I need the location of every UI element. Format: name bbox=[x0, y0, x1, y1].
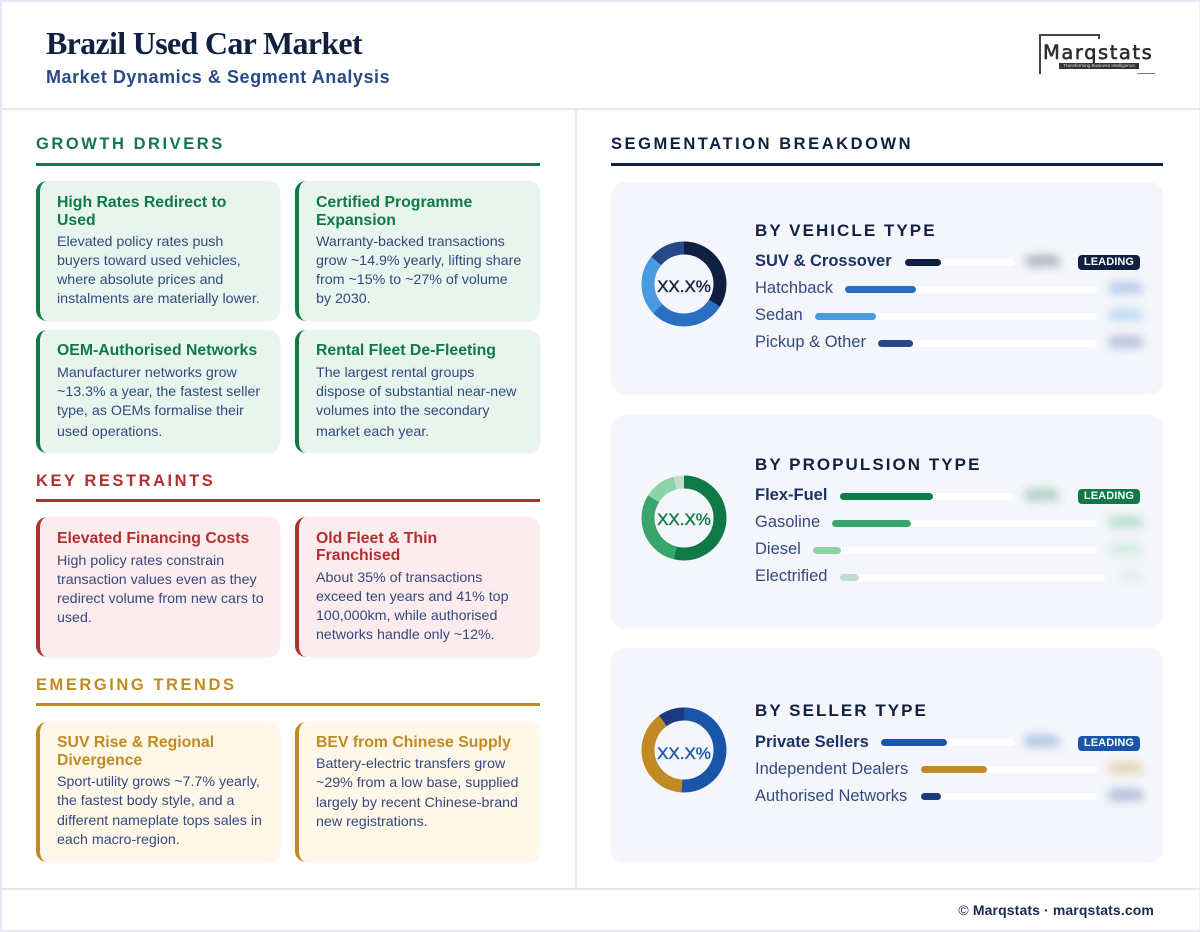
badge: leading: LEADING bbox=[1084, 256, 1134, 268]
bar: Private Sellers bbox=[881, 739, 1015, 746]
row: SUV: SUV & Crossover bbox=[755, 252, 892, 270]
bar: Flex-Fuel bbox=[840, 493, 1014, 500]
row: Pickup: Pickup & Other bbox=[755, 333, 866, 351]
logo: Marqstats: Transforming Business Intelligence bbox=[1063, 63, 1135, 68]
card: SUV rise: different nameplate tops sales in bbox=[57, 813, 262, 829]
card: BEV supply: BEV from Chinese Supply bbox=[316, 734, 511, 751]
donut value: XX.X% bbox=[657, 510, 711, 529]
row: Authorised Networks: Authorised Networks bbox=[755, 787, 907, 805]
bar: Authorised Networks bbox=[921, 793, 1097, 800]
value: Independent Dealers: XX% bbox=[1109, 760, 1142, 777]
header band bbox=[2, 2, 1200, 110]
value: Sedan: XX% bbox=[1109, 307, 1142, 324]
badge: leading: LEADING bbox=[1084, 490, 1134, 502]
heading: segmentation breakdown: SEGMENTATION BREAKDOWN bbox=[611, 135, 913, 153]
card: old fleet: exceed ten years and 41% top bbox=[316, 589, 509, 605]
bar: Sedan bbox=[815, 313, 1097, 320]
footer bbox=[2, 888, 1200, 932]
donut value: XX.X% bbox=[657, 277, 711, 296]
donut value: XX.X% bbox=[657, 744, 711, 763]
card: high rates: instalments are materially lower. bbox=[57, 291, 260, 307]
bar: Gasoline bbox=[832, 520, 1097, 527]
card: rental fleet: market each year. bbox=[316, 424, 429, 440]
bar: Electrified bbox=[840, 574, 1105, 581]
value: Pickup: XX% bbox=[1109, 334, 1142, 351]
panel: propulsion type bbox=[611, 415, 1163, 628]
card: high rates bbox=[36, 181, 280, 321]
card: old fleet: About 35% of transactions bbox=[316, 570, 482, 586]
card: certified programme: Expansion bbox=[316, 212, 396, 228]
card: high rates: where absolute prices and bbox=[57, 272, 223, 288]
card: rental fleet: dispose of substantial near-new bbox=[316, 384, 516, 400]
value: Electrified: X% bbox=[1119, 568, 1142, 585]
value: SUV: XX% bbox=[1026, 253, 1059, 270]
row: Private Sellers: Private Sellers bbox=[755, 733, 869, 751]
card: OEM networks bbox=[36, 330, 280, 453]
panel heading: BY SELLER TYPE bbox=[755, 701, 928, 720]
card: SUV rise: SUV Rise & Regional bbox=[57, 734, 214, 751]
panel heading: BY PROPULSION TYPE bbox=[755, 455, 981, 474]
card: financing costs: High policy rates constrain bbox=[57, 553, 224, 569]
card: old fleet: Old Fleet & Thin bbox=[316, 530, 437, 546]
donut: propulsion type bbox=[642, 476, 726, 560]
value: Authorised Networks: XX% bbox=[1109, 787, 1142, 804]
footer credit: © Marqstats · marqstats.com bbox=[958, 902, 1154, 918]
card: OEM networks: ~13.3% a year, the fastest seller bbox=[57, 384, 260, 400]
column divider bbox=[575, 110, 577, 888]
card: rental fleet bbox=[295, 330, 540, 453]
donut: seller type bbox=[642, 708, 726, 792]
card: rental fleet: The largest rental groups bbox=[316, 365, 474, 381]
card: rental fleet: Rental Fleet De-Fleeting bbox=[316, 342, 496, 359]
title: Brazil Used Car Market bbox=[46, 25, 362, 61]
card: BEV supply: new registrations. bbox=[316, 814, 428, 830]
bar: Diesel bbox=[813, 547, 1097, 554]
card: certified programme: Warranty-backed transactions bbox=[316, 234, 505, 250]
heading: key restraints: KEY RESTRAINTS bbox=[36, 472, 215, 490]
row: Diesel: Diesel bbox=[755, 540, 801, 558]
heading: growth drivers: GROWTH DRIVERS bbox=[36, 135, 225, 153]
card: BEV supply: ~29% from a low base, supplied bbox=[316, 775, 518, 791]
value: Flex-Fuel: XX% bbox=[1025, 487, 1058, 504]
card: financing costs: transaction values even as they bbox=[57, 572, 257, 588]
card: high rates: Elevated policy rates push bbox=[57, 234, 223, 250]
card: high rates: buyers toward used vehicles, bbox=[57, 253, 241, 269]
row: Sedan: Sedan bbox=[755, 306, 803, 324]
card: rental fleet: volumes into the secondary bbox=[316, 403, 489, 419]
card: certified programme: from ~15% to ~27% of volume bbox=[316, 272, 508, 288]
bar: Independent Dealers bbox=[921, 766, 1097, 773]
card: SUV rise: each macro-region. bbox=[57, 832, 180, 848]
bar: Pickup bbox=[878, 340, 1097, 347]
card: old fleet: Franchised bbox=[316, 547, 400, 564]
value: Diesel: XX% bbox=[1109, 541, 1142, 558]
card: SUV rise: the fastest body style, and a bbox=[57, 793, 234, 809]
badge: leading: LEADING bbox=[1084, 737, 1134, 749]
row: Hatchback: Hatchback bbox=[755, 279, 833, 297]
card: SUV rise: Sport-utility grows ~7.7% yearly, bbox=[57, 774, 260, 790]
card: old fleet bbox=[295, 517, 540, 657]
panel heading: BY VEHICLE TYPE bbox=[755, 221, 937, 240]
bar: SUV bbox=[905, 259, 1015, 266]
card: BEV supply bbox=[295, 722, 540, 862]
row: Flex-Fuel: Flex-Fuel bbox=[755, 486, 827, 504]
subtitle: Market Dynamics & Segment Analysis bbox=[46, 67, 390, 87]
card: BEV supply: largely by recent Chinese-brand bbox=[316, 795, 518, 811]
panel: seller type bbox=[611, 648, 1163, 862]
bar: Hatchback bbox=[845, 286, 1097, 293]
card: OEM networks: used operations. bbox=[57, 424, 162, 440]
badge: leading bbox=[1078, 489, 1140, 504]
row: Independent Dealers: Independent Dealers bbox=[755, 760, 908, 778]
row: Electrified: Electrified bbox=[755, 567, 827, 585]
value: Hatchback: XX% bbox=[1109, 280, 1142, 297]
logo: Marqstats bbox=[1039, 34, 1155, 74]
card: SUV rise bbox=[36, 722, 280, 862]
card: OEM networks: OEM-Authorised Networks bbox=[57, 342, 257, 359]
card: old fleet: networks handle only ~12%. bbox=[316, 627, 495, 643]
value: Gasoline: XX% bbox=[1109, 514, 1142, 531]
card: certified programme: Certified Programme bbox=[316, 194, 472, 211]
card: certified programme: by 2030. bbox=[316, 291, 371, 307]
card: OEM networks: type, as OEMs formalise their bbox=[57, 403, 244, 419]
card: financing costs: Elevated Financing Costs bbox=[57, 530, 249, 546]
card: financing costs: used. bbox=[57, 610, 92, 626]
value: Private Sellers: XX% bbox=[1025, 733, 1058, 750]
card: certified programme bbox=[295, 181, 540, 321]
card: high rates: High Rates Redirect to bbox=[57, 194, 226, 211]
card: SUV rise: Divergence bbox=[57, 752, 142, 768]
row: Gasoline: Gasoline bbox=[755, 513, 820, 531]
card: financing costs bbox=[36, 517, 280, 657]
badge: leading bbox=[1078, 736, 1140, 751]
card: financing costs: redirect volume from new cars to bbox=[57, 591, 264, 607]
badge: leading bbox=[1078, 255, 1140, 270]
logo: Marqstats: Marqstats bbox=[1043, 41, 1153, 64]
card: high rates: Used bbox=[57, 212, 96, 228]
donut: vehicle type bbox=[642, 242, 726, 326]
card: BEV supply: Battery-electric transfers grow bbox=[316, 756, 505, 772]
card: old fleet: 100,000km, while authorised bbox=[316, 608, 497, 624]
heading: emerging trends: EMERGING TRENDS bbox=[36, 676, 237, 694]
card: OEM networks: Manufacturer networks grow bbox=[57, 365, 237, 381]
card: certified programme: grow ~14.9% yearly, lifting share bbox=[316, 253, 521, 269]
panel: vehicle type bbox=[611, 182, 1163, 394]
